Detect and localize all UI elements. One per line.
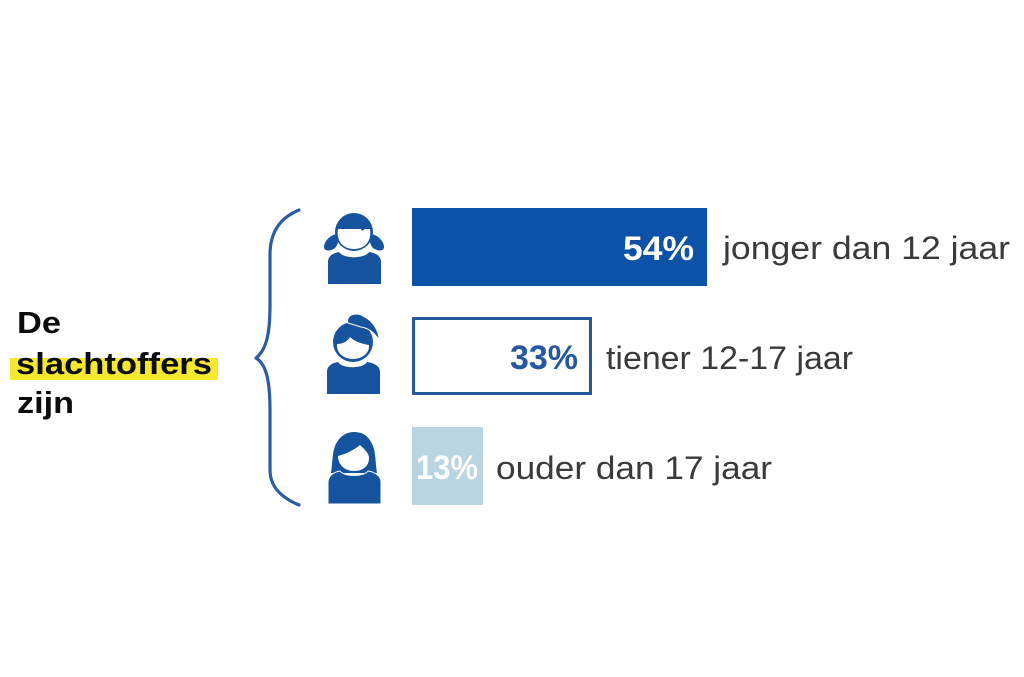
label: tiener 12-17 jaar: tiener 12-17 jaar: [606, 340, 853, 376]
bar: 13%: [412, 427, 483, 505]
icon: older girl with long hair: [328, 432, 381, 504]
label: jonger dan 12 jaar: jonger dan 12 jaar: [722, 230, 1010, 266]
icon: teen girl with ponytail: [327, 314, 380, 394]
heading: De slachtoffers zijn: [10, 305, 218, 420]
value: 13%: 13%: [416, 449, 478, 487]
heading line: slachtoffers: slachtoffers: [16, 346, 212, 381]
curly brace: [256, 210, 299, 505]
icon: girl with pigtails: [324, 213, 384, 284]
heading line: De: De: [17, 305, 61, 340]
value: 33%: 33%: [510, 339, 578, 377]
label: ouder dan 17 jaar: ouder dan 17 jaar: [496, 450, 772, 486]
yellow highlight: [10, 358, 218, 380]
heading line: zijn: zijn: [17, 385, 74, 420]
bar: 33%: [414, 318, 590, 394]
bar: 54%: [412, 208, 707, 286]
value: 54%: 54%: [623, 230, 694, 268]
